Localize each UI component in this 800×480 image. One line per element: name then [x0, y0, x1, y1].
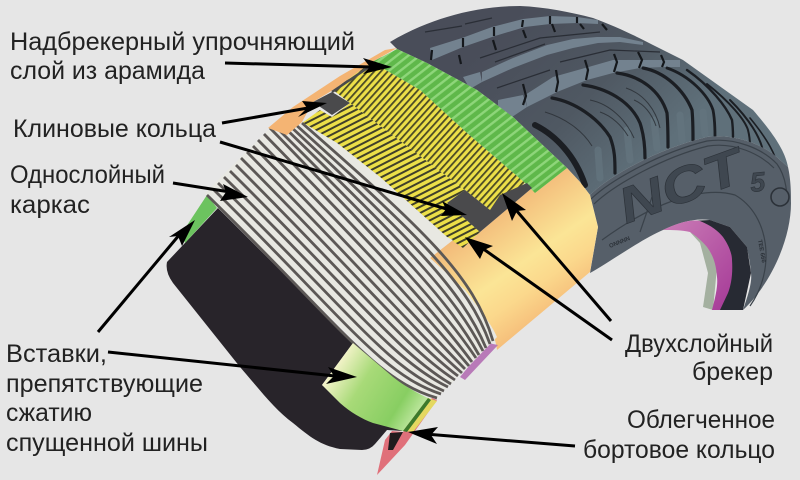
label: aramid layer: Надбрекерный упрочняющий [10, 28, 355, 56]
arrow: inner insert [108, 352, 357, 384]
green aramid overlay [372, 49, 567, 193]
sidewall [590, 136, 791, 310]
arrow: breaker upper [502, 193, 611, 321]
sidewall small markings: TEE 666 [756, 239, 766, 264]
tread block dark slits [431, 16, 664, 105]
label: run-flat inserts: Вставки, [6, 340, 107, 368]
wedge ring, small [313, 92, 350, 115]
sidewall brand lettering [611, 136, 768, 234]
label: breaker: Двухслойный [625, 330, 773, 358]
lower breaker layer [302, 103, 480, 248]
arrow: bead ring [408, 427, 575, 446]
tread block faces [430, 16, 680, 117]
label: aramid layer: слой из арамида [10, 57, 205, 85]
green side insert [182, 195, 217, 243]
label: wedge rings: Клиновые кольца [13, 115, 216, 143]
inner magenta layer [663, 221, 732, 310]
arrow: carcass [173, 183, 248, 201]
dark line under orange layer [332, 65, 372, 92]
sidewall brand lettering: NCT [611, 136, 755, 234]
label: run-flat inserts: препятствующие [6, 370, 203, 398]
purple edge [460, 343, 498, 380]
label: breaker: брекер [692, 358, 773, 386]
shoulder lug grooves [535, 68, 778, 185]
black run-flat rubber [167, 208, 403, 450]
arrow: aramid layer [225, 58, 392, 74]
carcass cords [207, 123, 493, 398]
inner dark liner of the bead [690, 220, 751, 310]
label: carcass [10, 161, 165, 219]
arrow: side insert [98, 220, 195, 332]
sidewall small markings [609, 236, 766, 264]
tire body [390, 6, 791, 310]
shoulder lug highlights [598, 112, 705, 178]
label: run-flat inserts [6, 340, 208, 457]
arrow: wedge ring, small [222, 101, 327, 123]
label: run-flat inserts: спущенной шины [6, 429, 208, 457]
label: carcass: каркас [10, 191, 90, 219]
label: bead ring [583, 406, 775, 464]
label: run-flat inserts: сжатию [6, 399, 92, 427]
inner grey-green layer [690, 232, 717, 310]
label: bead ring: Облегченное [627, 406, 775, 434]
sidewall brand lettering: 5 [748, 166, 768, 198]
sidewall emblem [771, 188, 789, 206]
label: bead ring: бортовое кольцо [583, 436, 775, 464]
carcass ply [205, 122, 497, 398]
label: aramid layer [10, 28, 355, 85]
sidewall ridge lines [591, 140, 787, 306]
arrow: breaker lower [465, 237, 612, 340]
tread fine grooves [425, 18, 660, 88]
bead ring [377, 398, 437, 475]
orange layer, right [430, 168, 598, 350]
tread [390, 6, 788, 195]
wedge ring, large [447, 183, 532, 232]
orange layer, upper left [268, 48, 397, 135]
tread sipes [545, 88, 660, 146]
sidewall small markings: ONNNN [609, 236, 631, 250]
green inner insert [322, 343, 428, 431]
upper breaker layer [333, 62, 525, 210]
label: carcass: Однослойный [10, 161, 165, 189]
arrow: wedge ring, large [220, 142, 467, 216]
label: breaker [625, 330, 773, 386]
